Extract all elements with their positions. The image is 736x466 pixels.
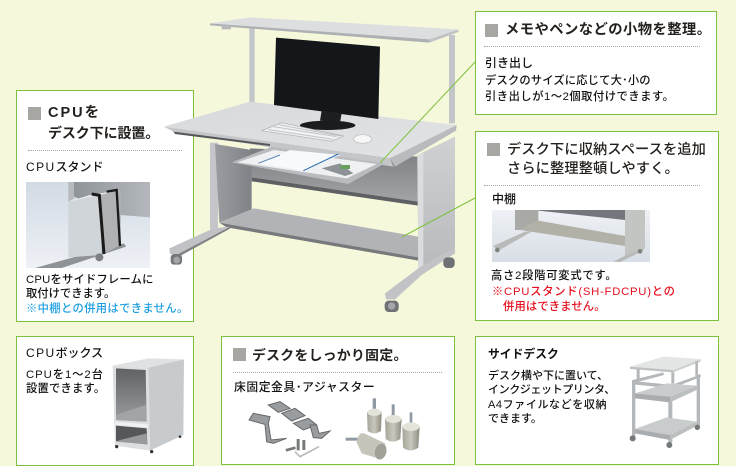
text: CPU stand description <box>26 274 189 315</box>
text: side desk description: デスク横や下に置いて、 <box>488 370 608 382</box>
text: CPU box description <box>26 368 105 395</box>
text: side desk description: できます。 <box>488 413 542 425</box>
panel: storage under desk <box>475 131 719 321</box>
heading: CPU under desk: CPUを <box>48 105 101 121</box>
desk posts <box>249 27 455 123</box>
text: adjustable height: 高さ2段階可変式です。 <box>491 270 617 282</box>
icon: heading square <box>28 107 41 120</box>
icon: heading square <box>485 24 498 37</box>
image: floor brackets <box>248 401 332 458</box>
right side panel <box>417 137 455 268</box>
label: middle shelf: 中棚 <box>492 192 516 206</box>
desk top <box>164 102 457 167</box>
keyboard <box>262 123 343 141</box>
text: side desk description: インクジェットプリンタ、 <box>488 384 615 396</box>
text: red caution: 併用はできません。 <box>503 300 606 312</box>
lower shelf <box>219 208 418 261</box>
text: CPU box description: 設置できます。 <box>26 383 105 395</box>
divider <box>484 185 700 186</box>
monitor <box>274 38 380 130</box>
panel: fix the desk <box>221 336 455 465</box>
label: floor brackets and adjusters: 床固定金具･アジャスター <box>234 380 375 394</box>
heading: add storage space: さらに整理整頓しやすく。 <box>507 161 679 177</box>
image: adjusters <box>346 398 420 460</box>
callout line: shelf <box>402 198 475 237</box>
text: side desk description: A4ファイルなどを収納 <box>488 399 607 411</box>
heading: fix the desk firmly: デスクをしっかり固定。 <box>252 348 408 363</box>
mouse <box>354 135 372 143</box>
upper shelf <box>210 17 458 43</box>
divider <box>484 46 700 47</box>
heading: add storage space: デスク下に収納スペースを追加 <box>507 142 706 158</box>
back panel <box>250 148 418 206</box>
icon: heading square <box>487 143 500 156</box>
left foot and casters <box>169 227 230 265</box>
pull-out drawer <box>232 147 385 184</box>
icon: heading square <box>233 348 246 361</box>
label: CPU box: CPUボックス <box>26 346 103 360</box>
panel: small items <box>475 11 717 115</box>
divider <box>233 372 442 373</box>
text: side desk description <box>488 370 615 425</box>
right foot and casters <box>385 248 455 312</box>
panel: side desk <box>475 336 719 465</box>
text: red caution: ※CPUスタンド(SH-FDCPU)との <box>492 286 676 298</box>
text: drawer description: デスクのサイズに応じて大･小の <box>485 75 651 87</box>
photo: CPU stand <box>26 182 150 268</box>
left side panel <box>210 143 252 229</box>
heading: CPU under desk: デスク下に設置。 <box>48 125 159 141</box>
heading: organize small items: メモやペンなどの小物を整理。 <box>505 22 711 38</box>
heading: CPU under desk <box>48 104 159 141</box>
text: drawer description <box>485 74 674 102</box>
photo: middle shelf <box>492 210 650 262</box>
heading: add storage space <box>507 142 706 177</box>
text: red caution <box>492 285 676 312</box>
label: drawer: 引き出し <box>485 56 533 70</box>
text: CPU stand description: ※中棚との併用はできません。 <box>26 303 189 315</box>
callout line: drawer <box>380 62 475 163</box>
panel: CPU box <box>16 336 194 466</box>
text: CPU stand description: 取付けできます。 <box>26 288 115 300</box>
label: side desk: サイドデスク <box>488 347 559 361</box>
text: CPU stand description: CPUをサイドフレームに <box>26 274 154 286</box>
divider <box>28 150 182 151</box>
label: CPU stand: CPUスタンド <box>26 160 104 174</box>
text: drawer description: 引き出しが1～2個取付けできます。 <box>485 90 674 102</box>
text: CPU box description: CPUを1～2台 <box>26 369 104 381</box>
image: CPU box <box>112 358 184 454</box>
panel: CPU under desk <box>16 90 194 322</box>
image: side desk <box>630 356 701 448</box>
